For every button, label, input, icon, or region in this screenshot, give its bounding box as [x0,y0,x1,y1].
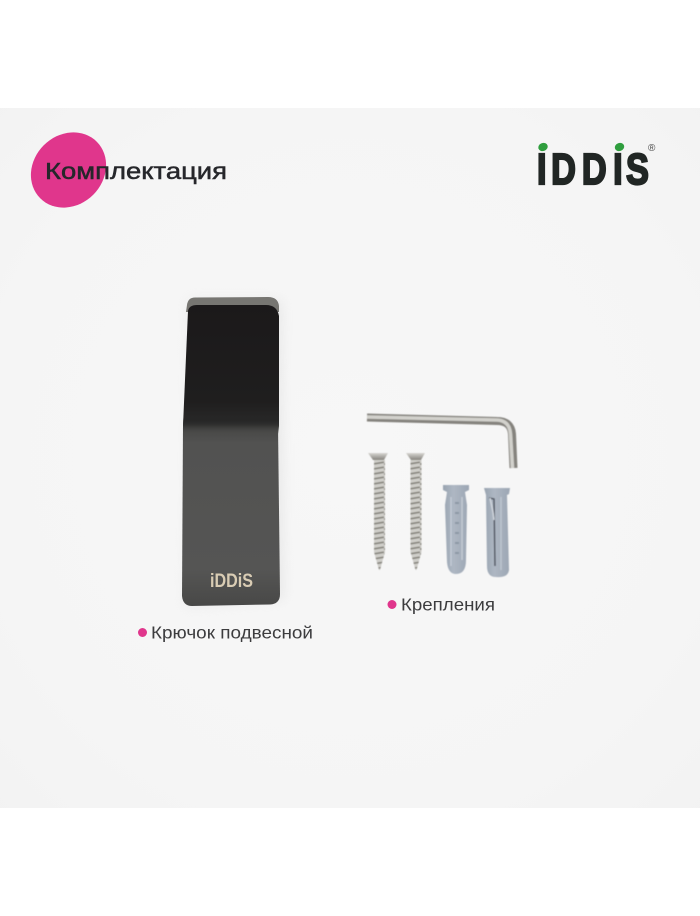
pink blob behind heading [15,117,122,223]
label: hook: Крючок подвесной [151,622,313,642]
logo green dots [537,142,625,152]
hook soft shadow [186,300,284,606]
hook top edge [186,297,279,312]
logo registered mark: ® [648,143,656,154]
bullet [138,628,147,637]
screw 1 [368,453,388,570]
hook dark upper face [183,305,279,426]
hook lower plate [182,425,280,606]
photo background panel [0,108,700,808]
hook engraved logo: iDDiS [210,571,253,592]
product: wall hook [182,297,284,606]
screw 2 [406,453,425,570]
hook fold shading [183,418,279,434]
label: fasteners: Крепления [401,594,495,614]
logo wordmark: IDDIS [537,145,649,194]
wall plug 2 [484,488,510,577]
hex key [367,417,514,468]
bullet [388,600,396,609]
fasteners [367,417,514,577]
wall plug 1 [443,485,469,574]
heading: Комплектация [45,158,227,184]
IDDIS logo [537,142,656,194]
